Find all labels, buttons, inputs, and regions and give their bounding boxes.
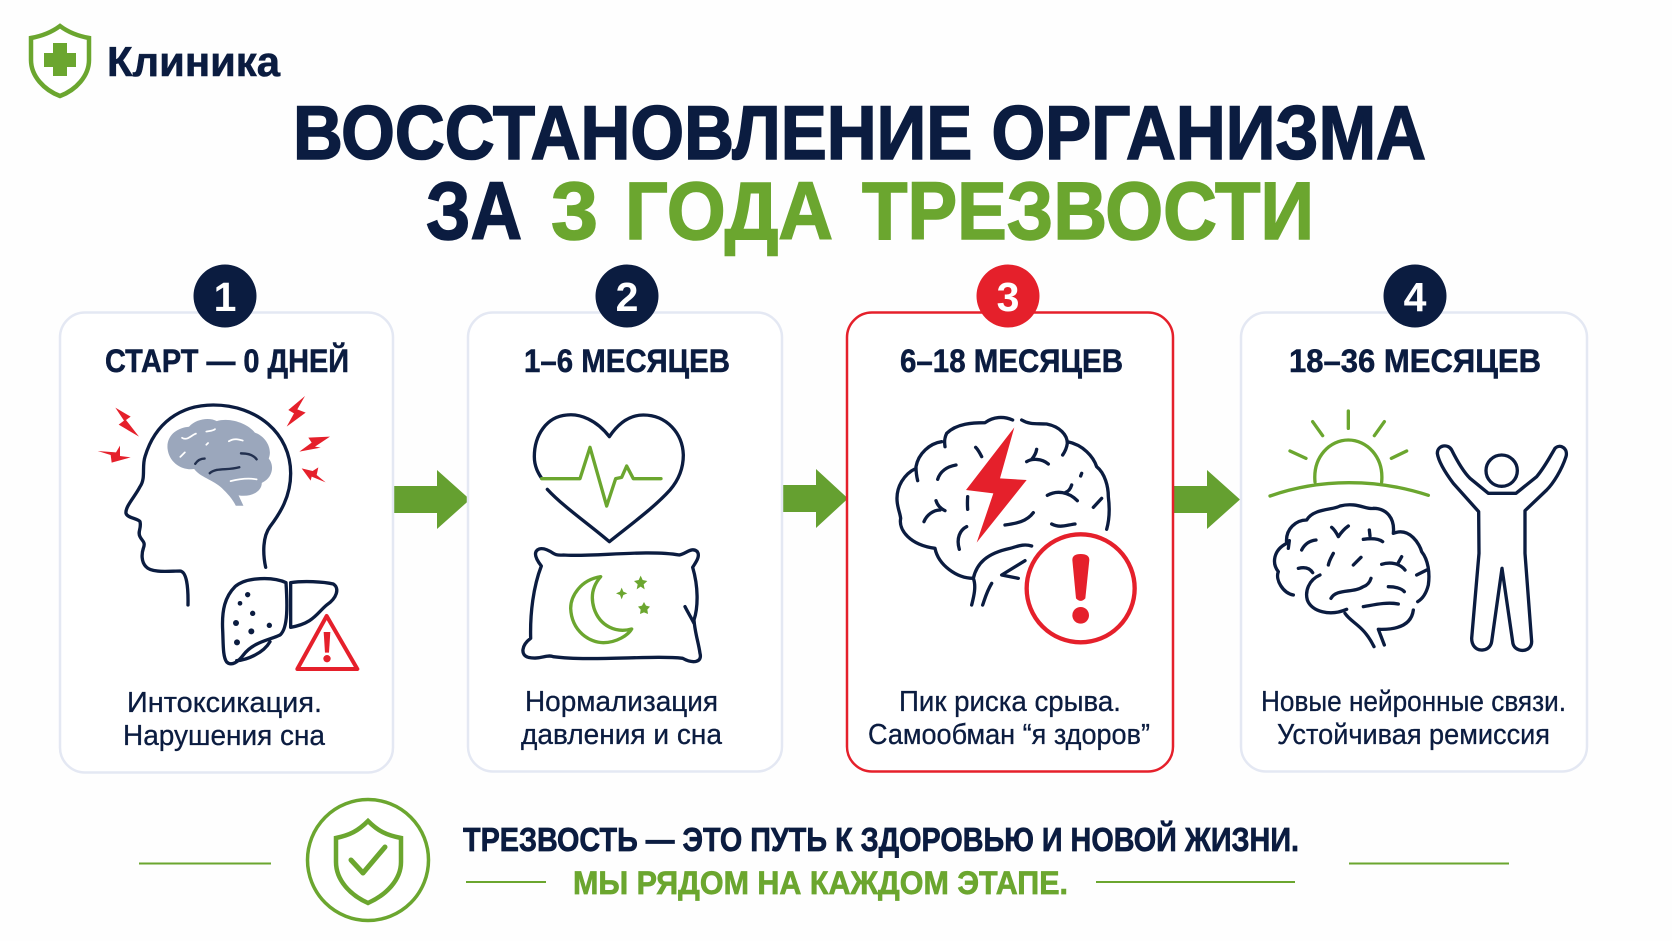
panel: step 2 months 1-6 — [468, 264, 782, 772]
heading: 6-18 months: 6–18 МЕСЯЦЕВ — [900, 343, 1123, 379]
title: ТРЕЗВОСТИ — [862, 166, 1314, 257]
footer — [139, 800, 1509, 920]
description 3: Самообман “я здоров” — [868, 719, 1150, 751]
description 4 — [1261, 686, 1566, 751]
icon: heart with pulse and pillow with moon — [523, 415, 700, 662]
badge 3: 3 — [997, 274, 1019, 320]
title — [293, 91, 1426, 257]
heading: 1-6 months: 1–6 МЕСЯЦЕВ — [524, 343, 730, 379]
description 2: давления и сна — [521, 719, 722, 751]
icon: head with brain, liver and warning — [98, 396, 357, 669]
title: ЗА — [426, 166, 522, 257]
moon — [571, 577, 632, 643]
alert circle — [1027, 534, 1135, 642]
brain outline — [897, 417, 1109, 605]
description 1: Нарушения сна — [123, 720, 325, 752]
description 1 — [123, 687, 325, 752]
logo — [31, 26, 281, 96]
badge 2: 2 — [616, 274, 638, 320]
icon: shield with cross — [31, 26, 89, 96]
panel: step 3 months 6-18 highlighted — [847, 264, 1173, 772]
icon: sunrise, brain and person — [1270, 411, 1566, 650]
title: ВОССТАНОВЛЕНИЕ ОРГАНИЗМА — [293, 91, 1426, 176]
arrow 3 — [1173, 470, 1240, 529]
description 3: Пик риска срыва. — [899, 686, 1121, 718]
arrow 1 — [394, 470, 470, 529]
badge 1: 1 — [214, 274, 236, 320]
badge 3 — [976, 264, 1040, 328]
panel: step 4 months 18-36 — [1241, 264, 1587, 772]
badge 2 — [596, 264, 658, 328]
footer main text: ТРЕЗВОСТЬ — ЭТО ПУТЬ К ЗДОРОВЬЮ И НОВОЙ ЖИЗНИ. — [463, 820, 1299, 858]
logo wordmark: Клиника — [107, 38, 281, 85]
title: ГОДА — [625, 166, 833, 257]
footer green text: МЫ РЯДОМ НА КАЖДОМ ЭТАПЕ. — [573, 865, 1068, 901]
brain grey — [167, 419, 272, 506]
pillow — [523, 549, 700, 662]
bolts — [98, 396, 330, 482]
panel: step 1 start — [60, 264, 393, 772]
description 2 — [521, 686, 722, 751]
badge 4: 4 — [1404, 274, 1427, 320]
description 4: Новые нейронные связи. — [1261, 686, 1566, 718]
heading: 18-36 months: 18–36 МЕСЯЦЕВ — [1289, 343, 1541, 379]
heading: start: СТАРТ — 0 ДНЕЙ — [105, 343, 349, 379]
stars — [616, 576, 650, 614]
icon: shield with check — [308, 800, 428, 920]
heart — [534, 415, 683, 542]
warning triangle — [297, 616, 357, 669]
sunrise — [1270, 411, 1428, 496]
title: 3 — [551, 166, 598, 257]
liver — [222, 579, 337, 664]
description 1: Интоксикация. — [127, 687, 322, 719]
arrow 2 — [783, 469, 848, 528]
person — [1437, 446, 1566, 650]
description 2: Нормализация — [525, 686, 718, 718]
description 3 — [868, 686, 1150, 751]
badge 1 — [194, 264, 256, 328]
head outline — [126, 405, 291, 605]
icon: brain with lightning and alert — [897, 417, 1135, 642]
badge 4 — [1384, 264, 1446, 328]
description 4: Устойчивая ремиссия — [1277, 719, 1550, 751]
brain outline — [1275, 505, 1429, 647]
lightning bolt — [966, 427, 1027, 543]
